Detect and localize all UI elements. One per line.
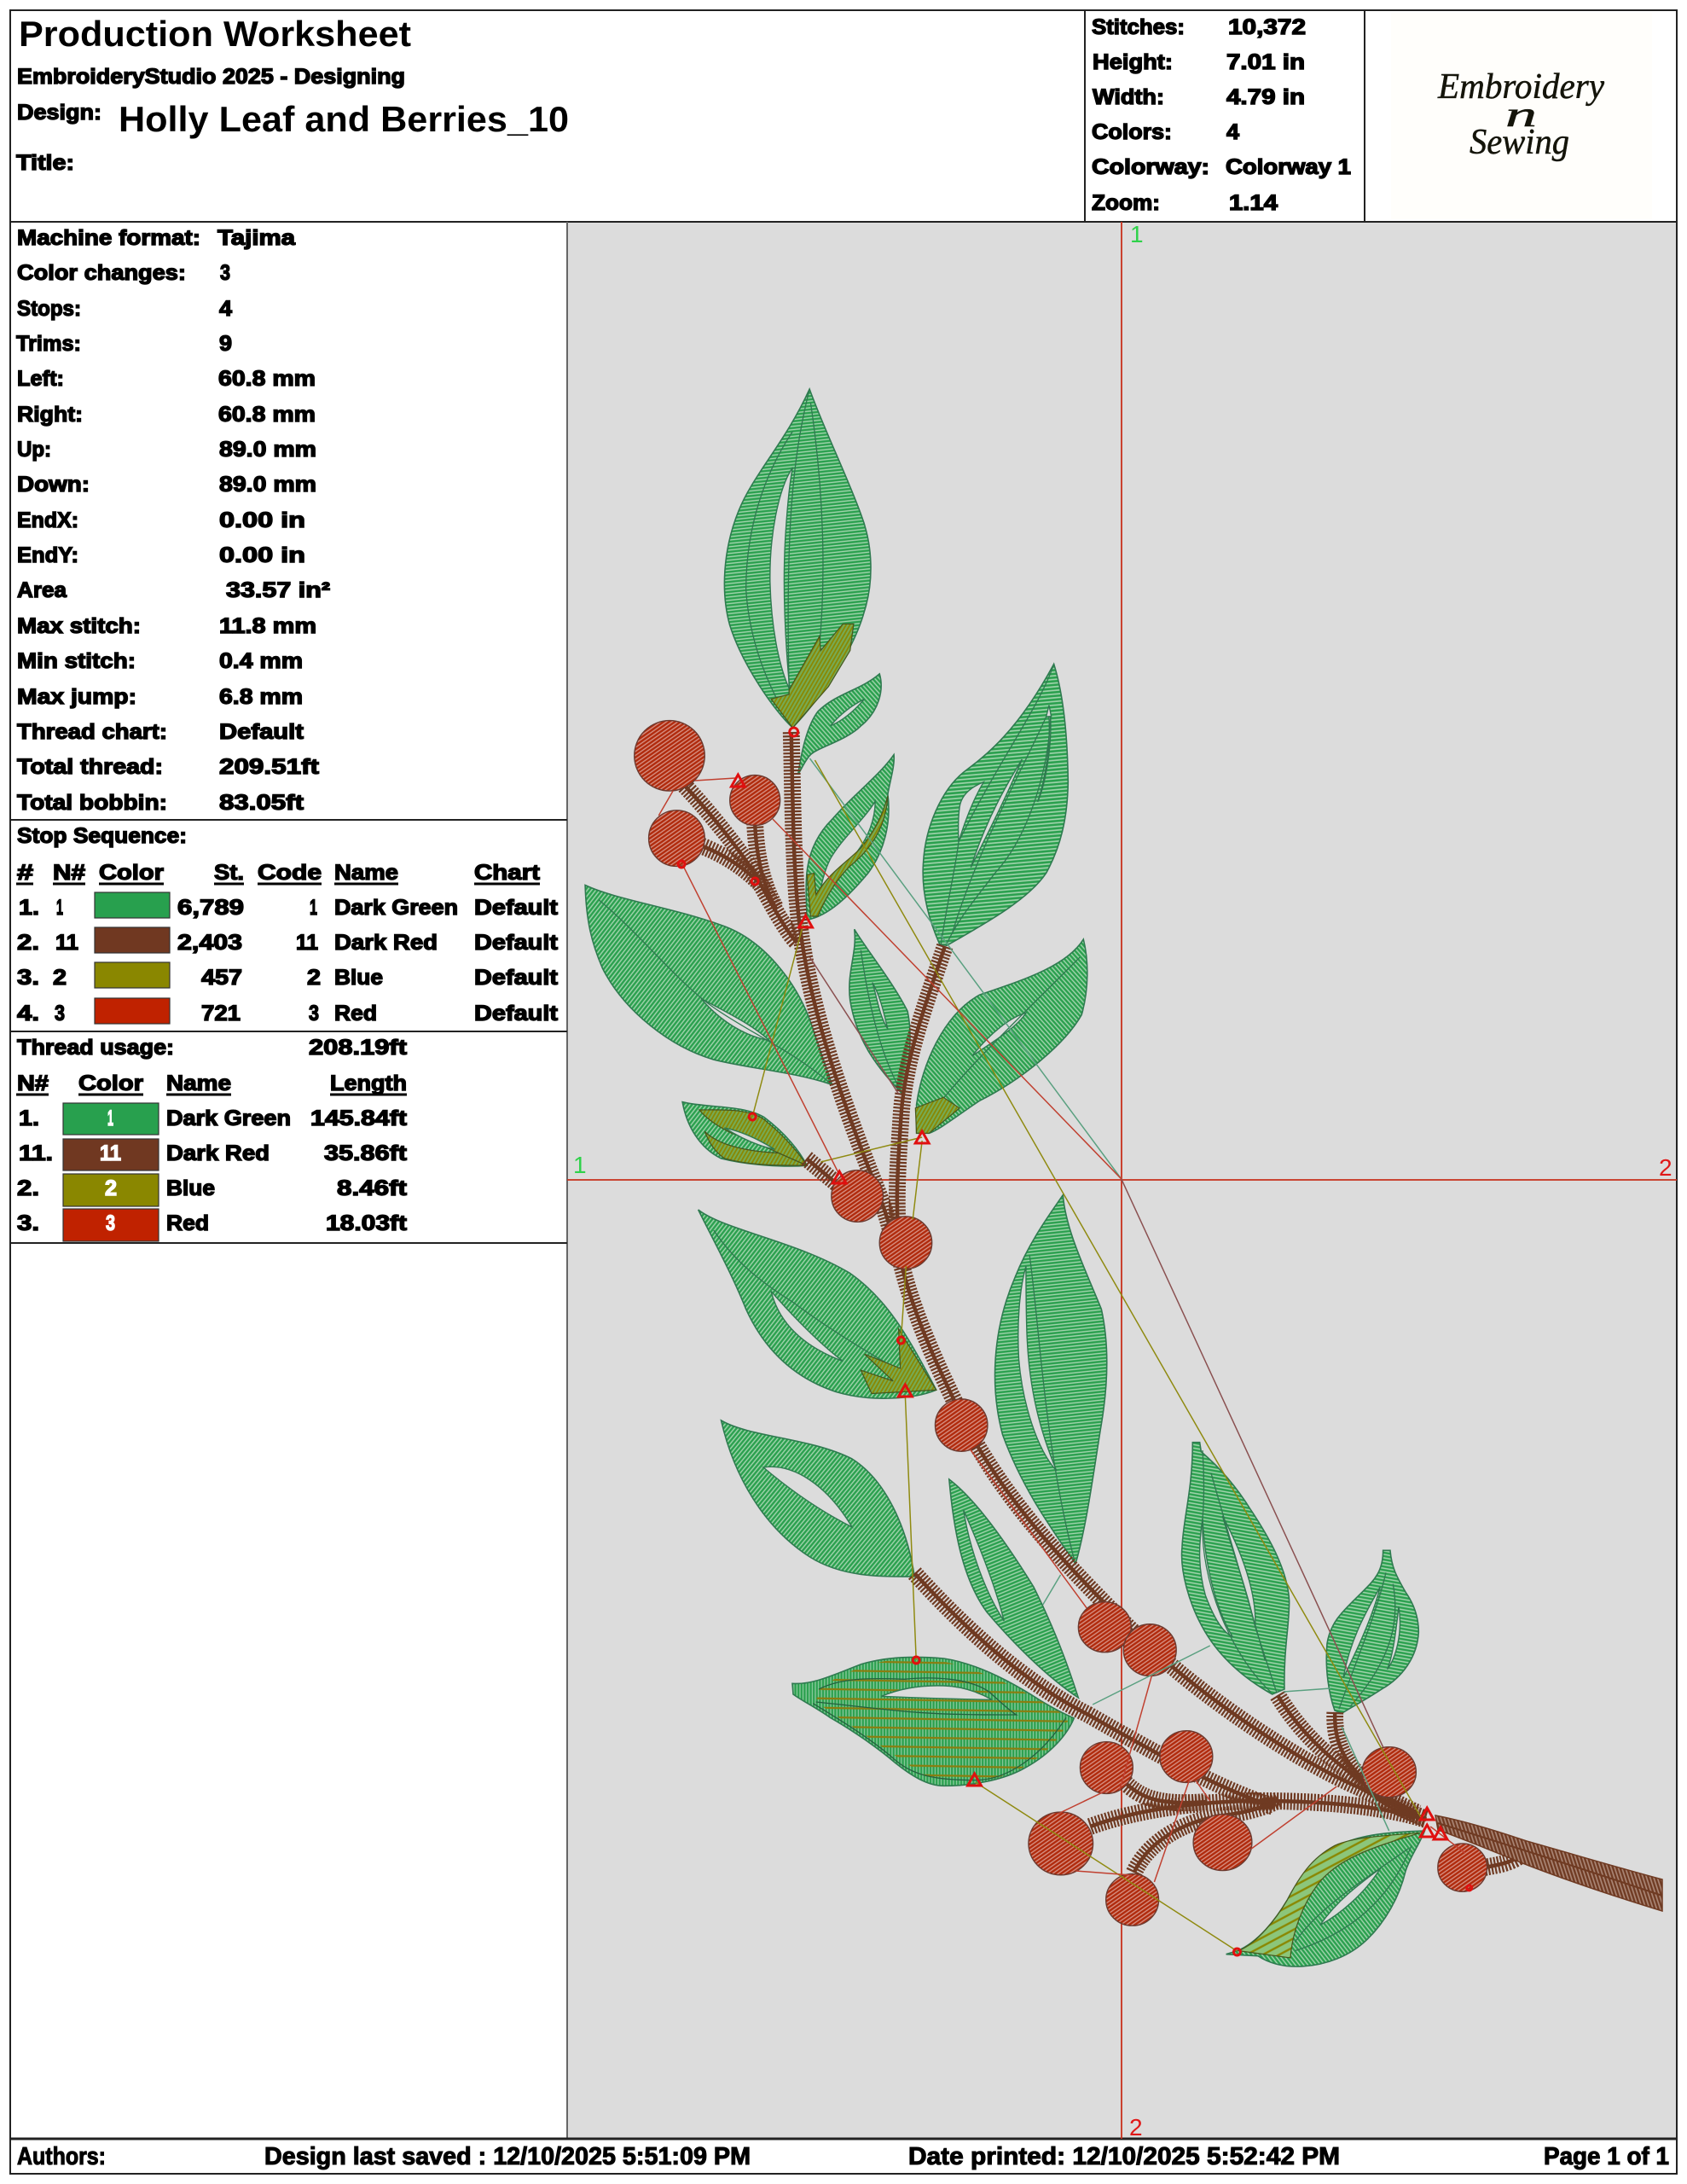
panel: design summary stats: Width: bbox=[1093, 85, 1164, 109]
table row: dark red: 11 bbox=[296, 931, 318, 955]
panel: design preview canvas bbox=[567, 222, 1677, 2139]
table row: blue: Blue bbox=[334, 966, 383, 990]
usage row: red: 18.03ft bbox=[326, 1211, 408, 1235]
usage row: red: Red bbox=[166, 1211, 209, 1235]
leaf: small olive left bbox=[682, 1102, 807, 1166]
panel: machine statistics: Machine format: bbox=[17, 226, 200, 250]
embroidery: lower left leaves bbox=[722, 1420, 1078, 1698]
table row: dark green: Dark Green bbox=[334, 896, 458, 920]
table row: blue: 3. bbox=[17, 966, 39, 990]
panel: design summary stats: Height: bbox=[1093, 50, 1173, 74]
panel: machine statistics: 89.0 mm bbox=[219, 438, 316, 462]
panel: machine statistics: Area bbox=[17, 578, 67, 602]
usage row: red: 3. bbox=[17, 1211, 39, 1235]
table row: red: 4. bbox=[17, 1002, 39, 1025]
embroidery: wide main stem end bbox=[1435, 1815, 1662, 1911]
crosshair axes: 1 bbox=[573, 1152, 587, 1178]
usage row: dark green: 145.84ft bbox=[310, 1107, 408, 1130]
table header row: Code bbox=[258, 861, 322, 885]
panel: design summary stats: 4.79 in bbox=[1226, 85, 1305, 109]
footer: design last saved: Design last saved : 12/10/2025 5:51:09 PM bbox=[264, 2143, 751, 2170]
table header row: N# bbox=[53, 861, 85, 885]
panel: design summary stats: 1.14 bbox=[1229, 191, 1278, 215]
table header row: Chart bbox=[474, 861, 541, 885]
panel: machine statistics: Up: bbox=[17, 438, 51, 462]
crosshair axes: 2 bbox=[1129, 2114, 1143, 2140]
leaf: large left bbox=[585, 885, 832, 1085]
panel: design summary stats bbox=[1092, 15, 1351, 215]
usage row: red: 3 bbox=[106, 1211, 115, 1235]
panel: machine statistics: 6.8 mm bbox=[219, 685, 303, 709]
panel: machine statistics: 0.00 in bbox=[219, 508, 305, 532]
usage row: red bbox=[17, 1209, 408, 1241]
panel: machine statistics: 89.0 mm bbox=[219, 473, 316, 497]
panel: machine statistics: 3 bbox=[220, 261, 230, 285]
jump stitch lines bbox=[658, 758, 1465, 1951]
table row: blue: 457 bbox=[201, 966, 242, 990]
panel: machine statistics: 60.8 mm bbox=[218, 403, 316, 427]
start and stop markers bbox=[678, 728, 1472, 1955]
panel: machine statistics: Stops: bbox=[17, 297, 81, 321]
table row: red: Red bbox=[334, 1002, 377, 1025]
panel: machine statistics bbox=[16, 226, 330, 815]
table row: dark red: 2. bbox=[17, 931, 39, 955]
usage row: dark green bbox=[19, 1103, 408, 1135]
table header row: Name bbox=[166, 1072, 231, 1095]
leaf: large middle left bbox=[699, 1210, 936, 1398]
logo: Embroidery n Sewing bbox=[1391, 13, 1652, 219]
embroidery: stems bbox=[682, 732, 1523, 1873]
usage row: blue: Blue bbox=[166, 1176, 215, 1200]
table row: dark green bbox=[19, 892, 559, 920]
panel: machine statistics: 0.4 mm bbox=[219, 649, 303, 673]
software subtitle: EmbroideryStudio 2025 - Designing bbox=[17, 65, 405, 89]
design label: Design: bbox=[17, 101, 101, 125]
panel: machine statistics: Tajima bbox=[217, 226, 296, 250]
usage row: dark green: Dark Green bbox=[166, 1107, 291, 1130]
leaf: lower left bbox=[722, 1420, 914, 1577]
table row: dark green: 6,789 bbox=[177, 896, 244, 920]
leaf: top bbox=[724, 389, 871, 728]
heading: thread usage: Thread usage: bbox=[17, 1036, 174, 1060]
panel: machine statistics: 0.00 in bbox=[219, 543, 305, 567]
usage row: dark red: 11 bbox=[100, 1141, 121, 1165]
panel: thread usage table bbox=[16, 1036, 408, 1241]
embroidery: middle berries bbox=[832, 1170, 988, 1451]
leaf: lower narrow bbox=[949, 1479, 1078, 1698]
footer: authors: Authors: bbox=[17, 2143, 106, 2170]
embroidery: upper leaves bbox=[724, 389, 894, 920]
table row: red bbox=[17, 998, 559, 1025]
usage row: dark green: 1. bbox=[19, 1107, 39, 1130]
panel: machine statistics: 209.51ft bbox=[219, 755, 320, 779]
panel: machine statistics: 4 bbox=[219, 297, 232, 321]
panel: machine statistics: Total thread: bbox=[17, 755, 163, 779]
panel: machine statistics: Down: bbox=[17, 473, 90, 497]
usage row: blue: 8.46ft bbox=[337, 1176, 408, 1200]
table header row: Length bbox=[330, 1072, 407, 1095]
footer: page number: Page 1 of 1 bbox=[1544, 2143, 1669, 2170]
table row: dark red: Default bbox=[474, 931, 559, 955]
table row: red: 3 bbox=[309, 1002, 319, 1025]
crosshair axes: 2 bbox=[1659, 1154, 1673, 1181]
leaf: small lower right bbox=[1326, 1550, 1418, 1713]
leaf: tall lower centre bbox=[1182, 1443, 1290, 1694]
leaf: narrow centre bbox=[849, 929, 910, 1094]
table row: blue: 2 bbox=[53, 966, 67, 990]
crosshair axes bbox=[567, 221, 1677, 2140]
panel: design summary stats: 4 bbox=[1226, 120, 1239, 144]
footer: date printed: Date printed: 12/10/2025 5:52:42 PM bbox=[908, 2143, 1340, 2170]
leaf: big olive-stitched bbox=[792, 1657, 1074, 1786]
panel: machine statistics: Trims: bbox=[16, 332, 81, 356]
panel: machine statistics: 11.8 mm bbox=[219, 614, 316, 638]
panel: machine statistics: 83.05ft bbox=[219, 791, 304, 815]
panel: design summary stats: Zoom: bbox=[1092, 191, 1160, 215]
panel: machine statistics: Default bbox=[219, 720, 304, 744]
panel: machine statistics: Thread chart: bbox=[17, 720, 167, 744]
usage row: blue bbox=[17, 1174, 408, 1206]
table row: dark green: 1 bbox=[310, 896, 317, 920]
table row: blue bbox=[17, 962, 559, 990]
table row: dark green: 1. bbox=[19, 896, 39, 920]
usage row: dark red: 35.86ft bbox=[324, 1141, 408, 1165]
panel: design summary stats: Stitches: bbox=[1092, 15, 1185, 39]
heading: stop sequence: Stop Sequence: bbox=[17, 824, 187, 848]
embroidery: lower berries bbox=[1029, 1602, 1487, 1926]
panel: machine statistics: Right: bbox=[17, 403, 83, 427]
logo: Embroidery n Sewing: Sewing bbox=[1470, 123, 1569, 162]
usage row: dark green: 1 bbox=[107, 1107, 113, 1130]
panel: machine statistics: Total bobbin: bbox=[17, 791, 167, 815]
table header row: # bbox=[17, 861, 33, 885]
table header row: Name bbox=[334, 861, 398, 885]
panel: stop sequence table bbox=[16, 824, 559, 1025]
leaf: with olive stripe bbox=[806, 755, 894, 920]
panel: machine statistics: EndY: bbox=[17, 543, 78, 567]
title: Production Worksheet bbox=[19, 14, 411, 54]
panel: design summary stats: 7.01 in bbox=[1226, 50, 1305, 74]
leaf: tall centre right bbox=[995, 1195, 1107, 1564]
logo: Embroidery n Sewing: n bbox=[1505, 96, 1537, 135]
usage row: dark red: Dark Red bbox=[166, 1141, 270, 1165]
table row: blue: Default bbox=[474, 966, 559, 990]
panel: machine statistics: Min stitch: bbox=[17, 649, 136, 673]
table header row: Color bbox=[78, 1072, 143, 1095]
panel: machine statistics: Max stitch: bbox=[17, 614, 141, 638]
panel: machine statistics: Max jump: bbox=[17, 685, 136, 709]
footer bar bbox=[17, 2143, 1669, 2170]
embroidery: upper berries bbox=[635, 721, 780, 866]
table row: dark green: Default bbox=[474, 896, 559, 920]
panel: machine statistics: Left: bbox=[17, 367, 64, 391]
panel: header title block bbox=[16, 14, 569, 175]
table row: dark red bbox=[17, 927, 559, 955]
leaf: small right of top stem bbox=[798, 674, 881, 775]
table row: red: Default bbox=[474, 1002, 559, 1025]
table header row bbox=[16, 1072, 407, 1095]
usage row: dark red: 11. bbox=[19, 1141, 53, 1165]
crosshair axes: 1 bbox=[1130, 221, 1144, 247]
table header row bbox=[16, 861, 541, 885]
panel: design summary stats: Colors: bbox=[1092, 120, 1172, 144]
table row: dark red: 2,403 bbox=[177, 931, 242, 955]
panel: machine statistics: EndX: bbox=[17, 508, 78, 532]
total thread usage: 208.19ft bbox=[309, 1036, 408, 1060]
panel: machine statistics: 33.57 in² bbox=[226, 578, 330, 602]
table row: dark green: 1 bbox=[56, 896, 63, 920]
leaf: upper right bbox=[923, 664, 1068, 945]
panel: machine statistics: 60.8 mm bbox=[218, 367, 316, 391]
panel: design summary stats: Colorway: bbox=[1092, 155, 1209, 179]
panel: design summary stats: Colorway 1 bbox=[1226, 155, 1351, 179]
table header row: N# bbox=[17, 1072, 49, 1095]
panel: machine statistics: 9 bbox=[219, 332, 232, 356]
usage row: dark red bbox=[19, 1139, 408, 1170]
table header row: Color bbox=[99, 861, 164, 885]
leaf: bottom right with olive edge bbox=[1226, 1831, 1424, 1966]
table row: dark red: Dark Red bbox=[334, 931, 438, 955]
logo: Embroidery n Sewing: Embroidery bbox=[1437, 67, 1604, 107]
usage row: blue: 2 bbox=[105, 1176, 117, 1200]
design name: Holly Leaf and Berries_10 bbox=[119, 99, 569, 139]
table row: dark red: 11 bbox=[55, 931, 78, 955]
table header row: St. bbox=[214, 861, 244, 885]
table row: red: 3 bbox=[55, 1002, 65, 1025]
panel: machine statistics: Color changes: bbox=[17, 261, 186, 285]
table row: blue: 2 bbox=[307, 966, 321, 990]
panel: design summary stats: 10,372 bbox=[1228, 15, 1306, 39]
usage row: blue: 2. bbox=[17, 1176, 39, 1200]
title label: Title: bbox=[16, 151, 74, 175]
leaf: right of middle stem bbox=[915, 939, 1087, 1133]
table row: red: 721 bbox=[201, 1002, 241, 1025]
embroidery: middle leaves bbox=[585, 885, 1107, 1564]
